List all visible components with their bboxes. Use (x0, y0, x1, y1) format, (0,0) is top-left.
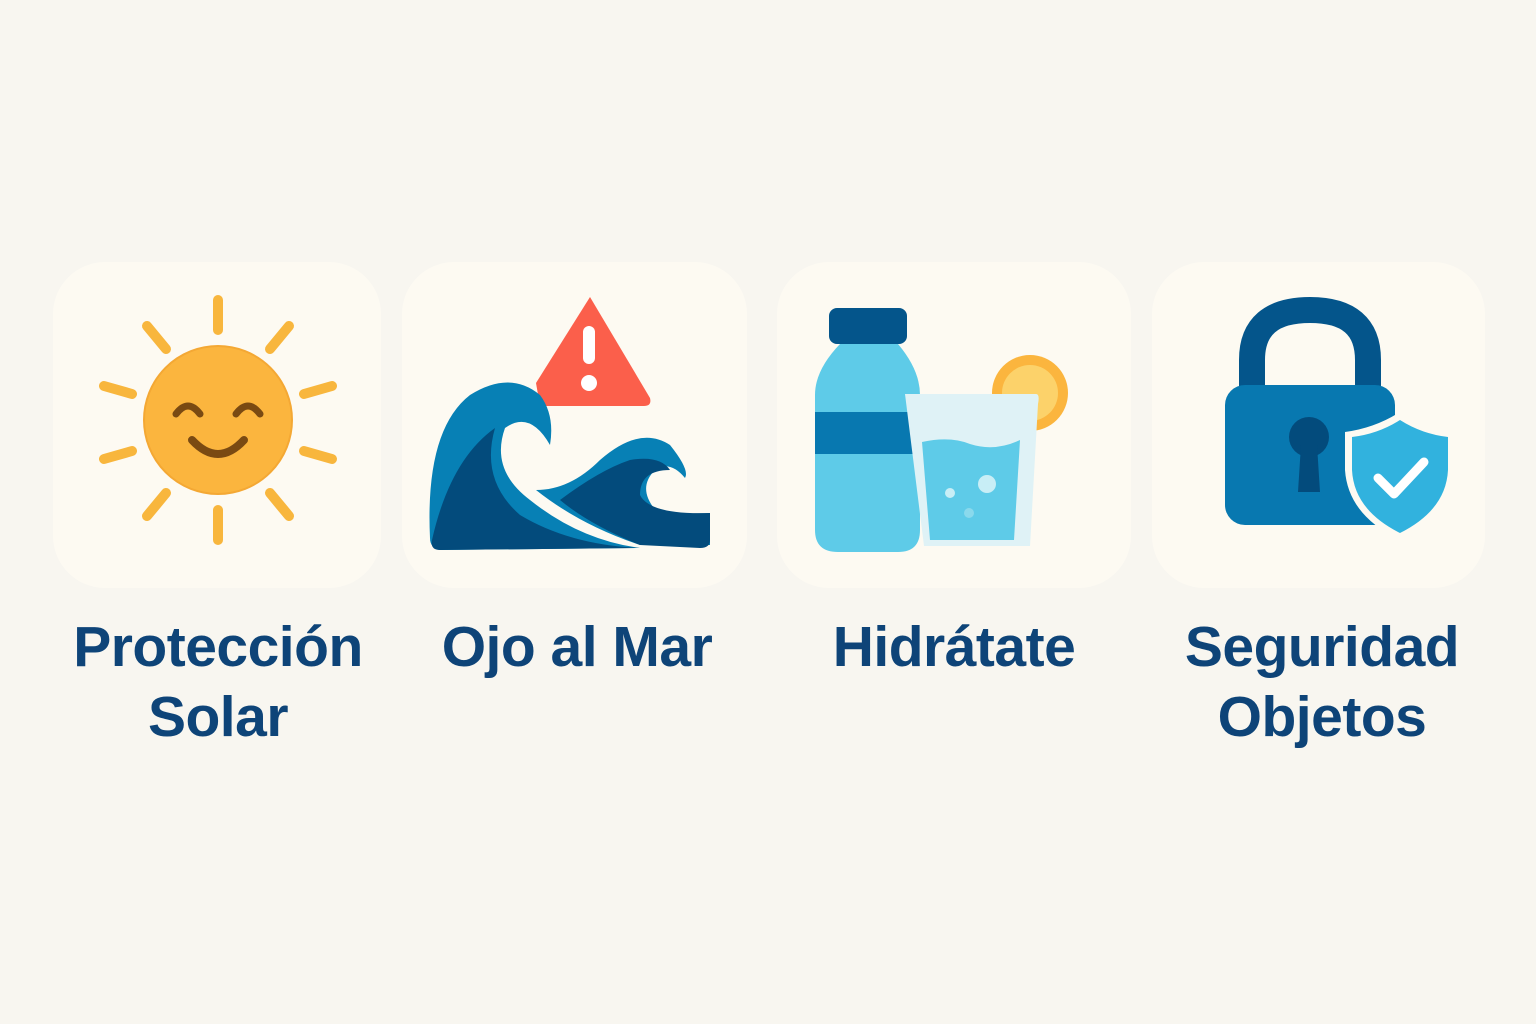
label: Protección Solar: Solar (148, 685, 288, 749)
label: Seguridad Objetos: Objetos (1218, 685, 1426, 749)
card: water (777, 262, 1131, 588)
label: Hidrátate: Hidrátate (833, 615, 1075, 679)
label: Ojo al Mar: Ojo al Mar (442, 615, 712, 679)
card: sun (53, 262, 381, 588)
label: Protección Solar: Protección (73, 615, 363, 679)
icon: padlock with shield (1225, 310, 1455, 540)
card: lock (1152, 262, 1485, 588)
icon: smiling sun (104, 300, 332, 540)
card: sea (402, 262, 747, 588)
icon: waves with warning (430, 297, 710, 550)
icon: bottle and glass (815, 308, 1068, 552)
label: Seguridad Objetos: Seguridad (1185, 615, 1459, 679)
label: Protección Solar (73, 615, 363, 749)
label: Seguridad Objetos (1185, 615, 1459, 749)
